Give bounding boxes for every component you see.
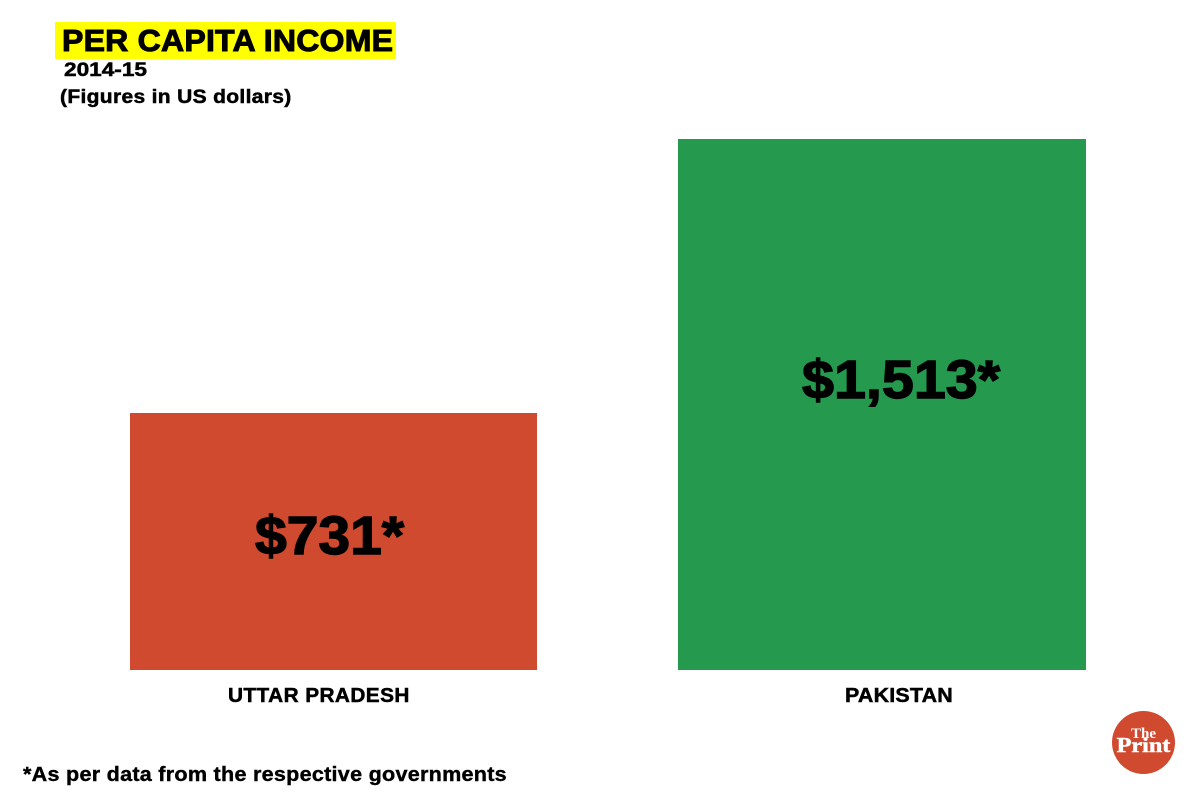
value: Pakistan: $1,513* [802, 350, 1000, 410]
logo: The Print: Print [1117, 733, 1170, 757]
bar: Pakistan [678, 139, 1086, 670]
subtitle: year: 2014-15 [64, 60, 147, 81]
label: Pakistan: PAKISTAN [845, 685, 953, 707]
footnote: *As per data from the respective governments [23, 764, 507, 786]
title: PER CAPITA INCOME [62, 23, 393, 58]
bar: Uttar Pradesh [130, 413, 537, 670]
logo: The Print: The [1131, 726, 1156, 742]
label: Uttar Pradesh: UTTAR PRADESH [228, 685, 410, 707]
value: Uttar Pradesh: $731* [255, 506, 404, 566]
subtitle: units: (Figures in US dollars) [60, 87, 292, 108]
logo: The Print [1112, 711, 1175, 774]
